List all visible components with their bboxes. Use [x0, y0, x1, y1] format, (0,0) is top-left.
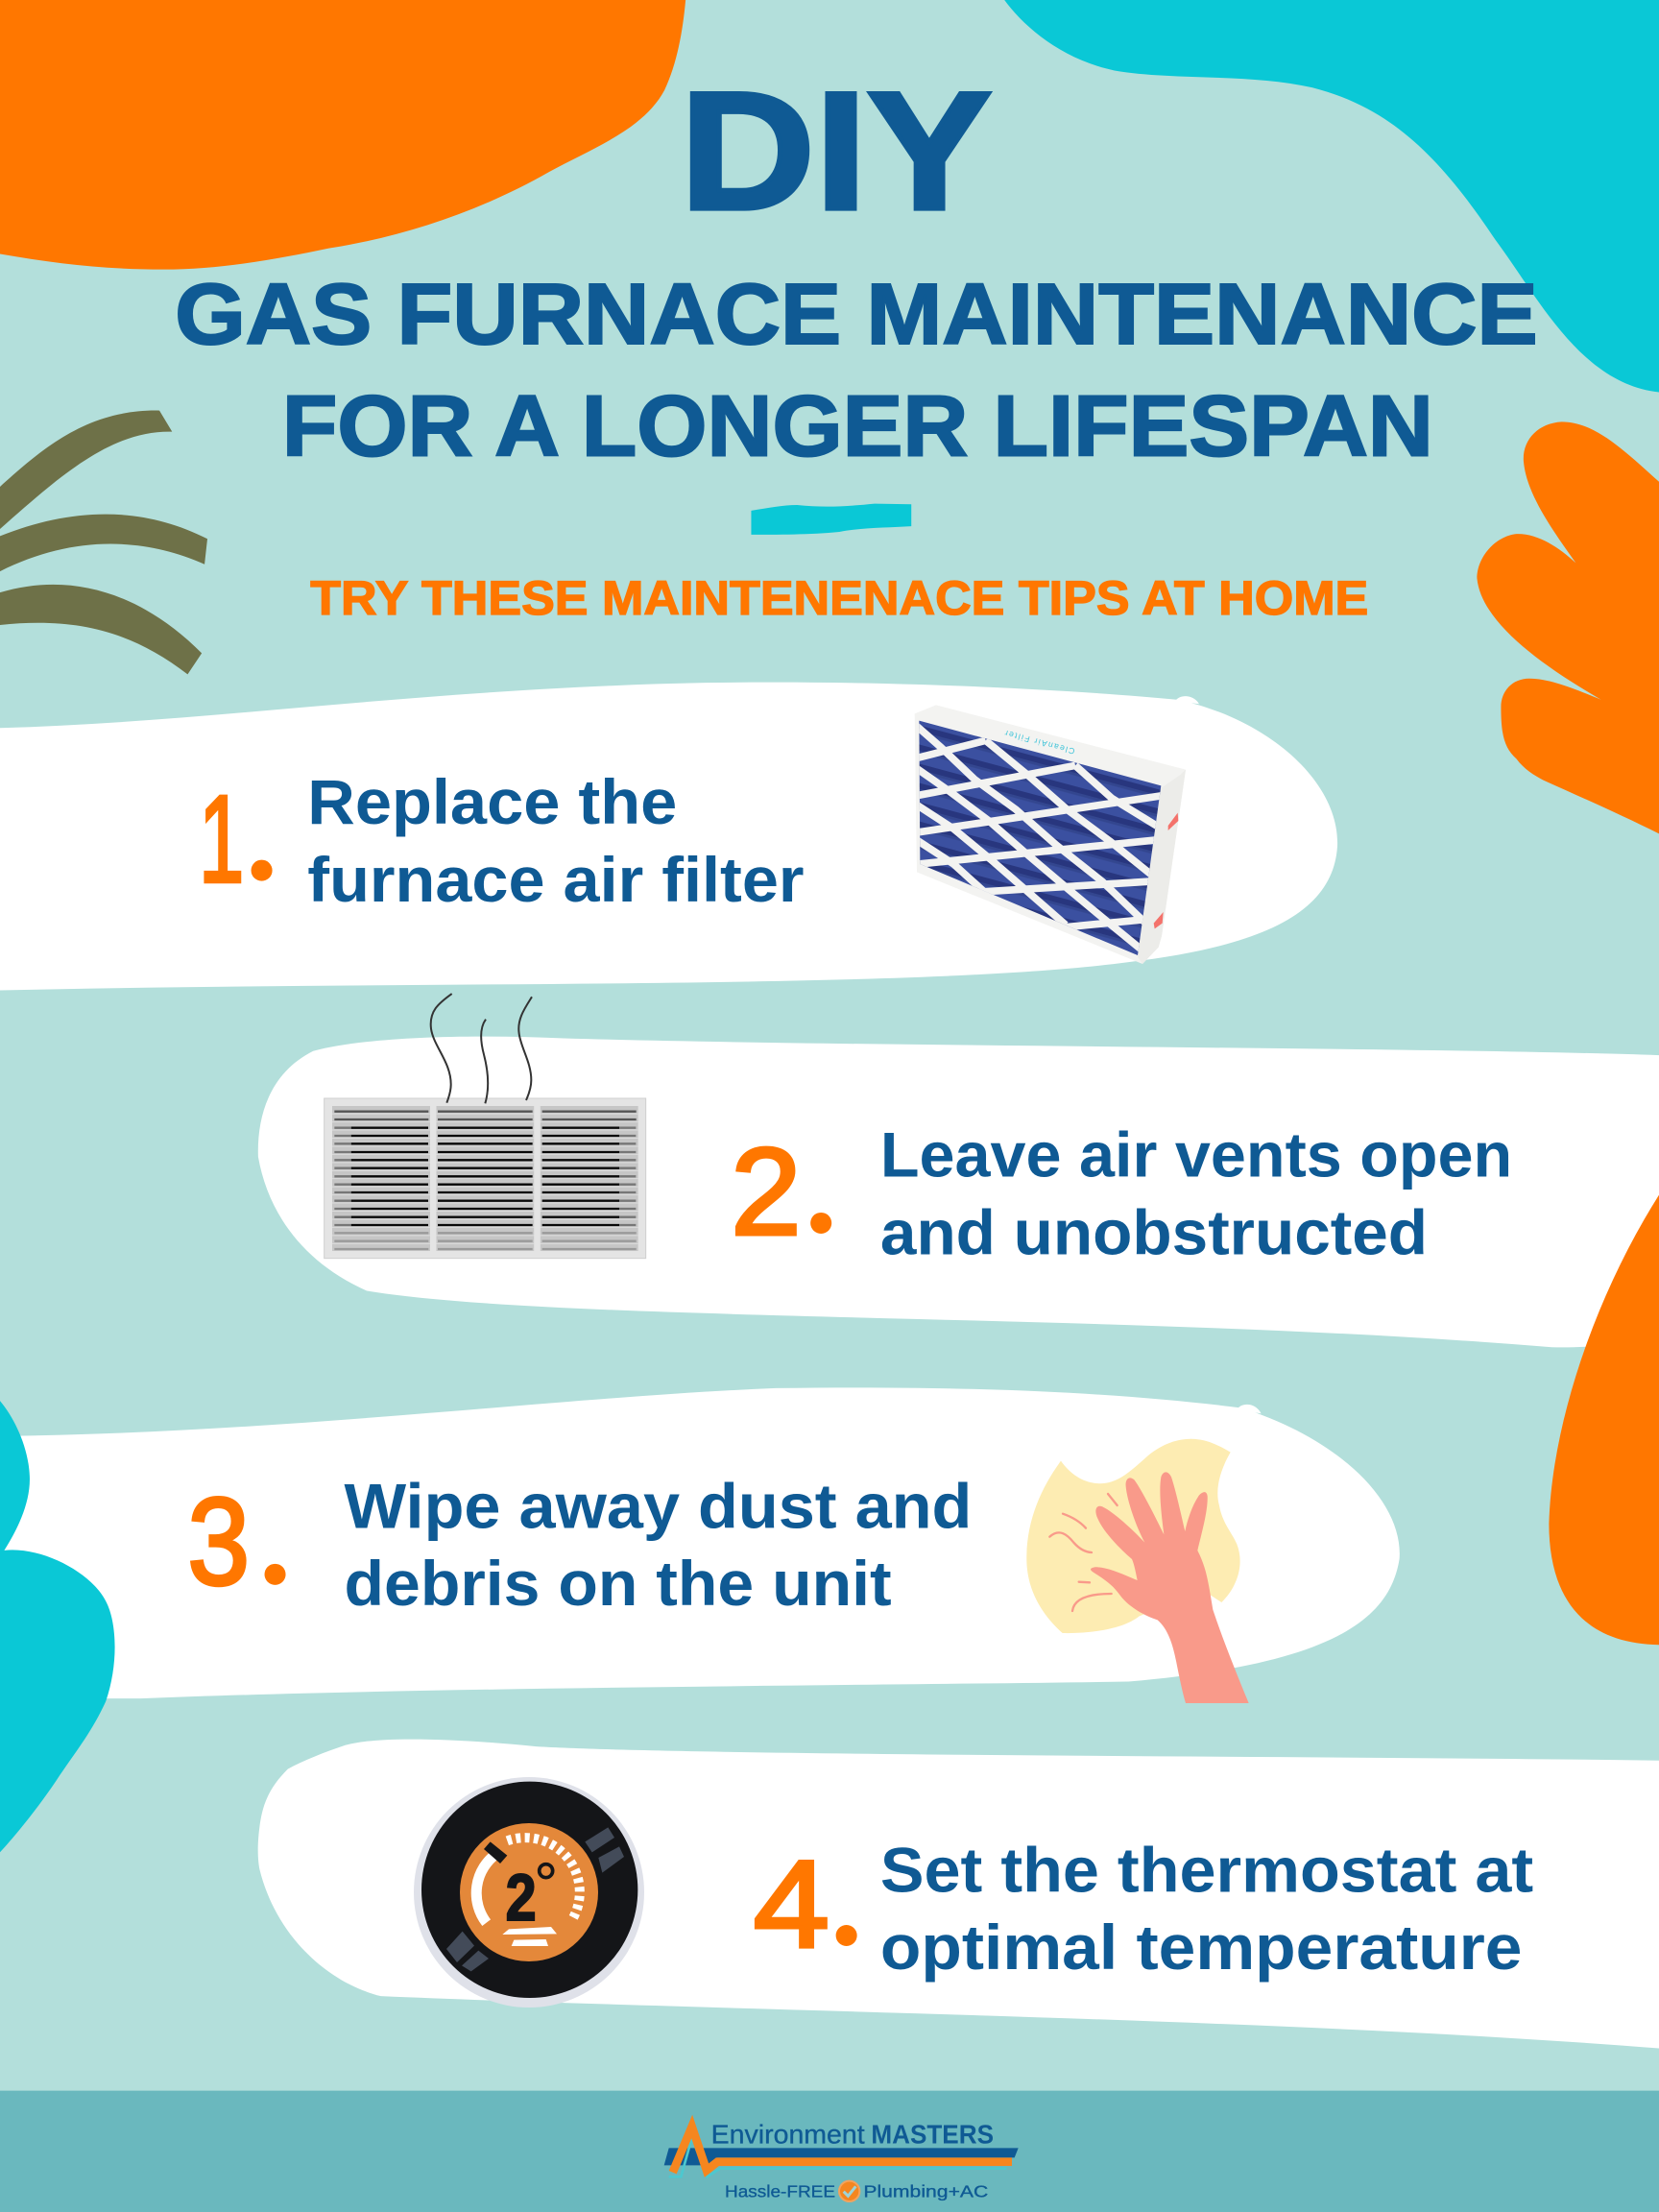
- white band: tip 1: [0, 683, 1337, 991]
- icon: hand wiping with cloth: [1026, 1439, 1249, 1703]
- teal blob top right: [1004, 0, 1659, 392]
- tip 1 text: [307, 767, 805, 916]
- orange blob top left: [0, 0, 685, 270]
- tip 3 number: 3: [187, 1473, 250, 1611]
- tip 2 text: Leave air vents open: [880, 1119, 1512, 1190]
- tip 1 number: 1: [199, 770, 244, 908]
- orange leaf right: [1477, 421, 1659, 833]
- footer bar: [0, 2091, 1659, 2212]
- tip 3 text: [345, 1471, 972, 1620]
- icon: thermostat: [414, 1777, 644, 2008]
- white band: tip 2: [258, 1037, 1659, 1347]
- teal accent stroke: [751, 504, 911, 535]
- logo: Environment MASTERS: Plumbing+AC: [863, 2181, 988, 2200]
- tip 4 text: Set the thermostat at: [880, 1835, 1533, 1906]
- tip 2 number: 2: [731, 1123, 802, 1262]
- icon: thermostat: 2: [506, 1862, 537, 1935]
- icon: air filter: CleanAir Filter: [1003, 729, 1076, 757]
- tip 1 text: Replace the: [307, 767, 677, 838]
- tip 2 text: [880, 1119, 1512, 1268]
- heading line 1: GAS FURNACE MAINTENANCE: [175, 266, 1538, 362]
- orange blob right: [1549, 1195, 1659, 1645]
- tip 3 text: debris on the unit: [345, 1549, 892, 1620]
- tip 4 number: [754, 1836, 857, 1974]
- tip 4 number: 4: [754, 1836, 830, 1974]
- icon: air filter: [915, 705, 1186, 964]
- tip 4 text: optimal temperature: [880, 1912, 1522, 1984]
- heading line 2: FOR A LONGER LIFESPAN: [282, 378, 1433, 474]
- white band: tip 3: [0, 1387, 1400, 1698]
- logo: Environment MASTERS: [664, 2119, 1019, 2201]
- white band: tip 4: [258, 1740, 1659, 2049]
- olive leaves: [0, 411, 207, 674]
- logo: Environment MASTERS: Environment: [711, 2119, 865, 2149]
- logo: Environment MASTERS: MASTERS: [871, 2119, 994, 2149]
- tip 2 text: and unobstructed: [880, 1197, 1428, 1268]
- teal leaf left: [0, 1401, 115, 1852]
- icon: air vent with steam: [325, 994, 646, 1259]
- logo: Environment MASTERS: Hassle-FREE: [725, 2181, 835, 2200]
- tip 4 text: [880, 1835, 1533, 1984]
- title: DIY: [680, 58, 992, 245]
- subtitle: TRY THESE MAINTENENACE TIPS AT HOME: [310, 571, 1368, 625]
- tip 3 text: Wipe away dust and: [345, 1471, 972, 1542]
- tip 1 text: furnace air filter: [307, 845, 805, 916]
- tip 2 number: [731, 1123, 831, 1262]
